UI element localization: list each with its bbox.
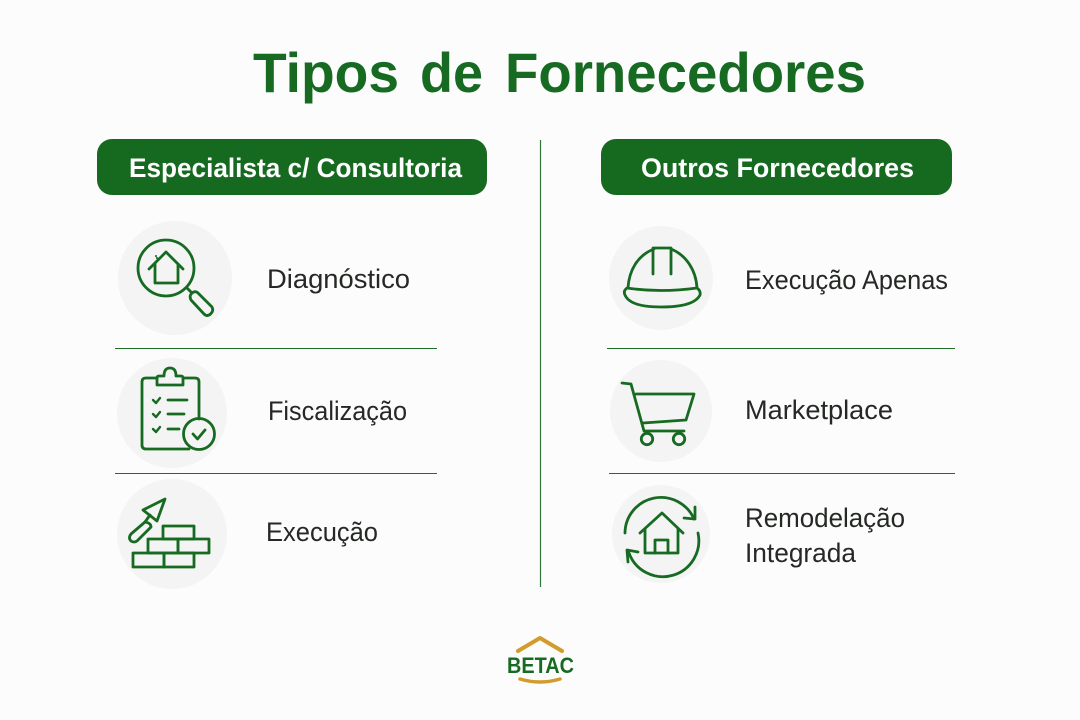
title [253, 41, 866, 104]
title: de [420, 41, 483, 104]
title: Tipos [253, 41, 399, 104]
label: remodelação integrada: Remodelação [745, 503, 905, 533]
icon: trowel and bricks [117, 479, 227, 589]
icon: house with renewal arrows [612, 485, 710, 583]
logo: betac: BETAC [507, 653, 574, 678]
label: remodelação integrada: Integrada [745, 538, 857, 568]
label: fiscalização: Fiscalização [268, 396, 407, 426]
label: marketplace: Marketplace [745, 395, 893, 425]
heading: outros fornecedores [601, 139, 952, 195]
panel: outros fornecedores [601, 139, 952, 583]
heading: especialista com consultoria [97, 139, 487, 195]
icon: hard hat [609, 226, 713, 330]
label: diagnóstico: Diagnóstico [267, 264, 410, 294]
logo: betac [507, 638, 574, 682]
label: execução apenas: Execução Apenas [745, 265, 948, 295]
panel: especialista com consultoria [97, 139, 487, 589]
label: execução: Execução [266, 517, 378, 547]
heading: outros fornecedores: Outros Fornecedores [641, 153, 914, 183]
heading: especialista com consultoria: Especialista c/ Consultoria [129, 153, 463, 183]
icon: shopping cart [610, 360, 712, 462]
icon: magnifying glass over house [118, 221, 232, 335]
icon: clipboard with checklist [117, 358, 227, 468]
title: Fornecedores [505, 41, 866, 104]
